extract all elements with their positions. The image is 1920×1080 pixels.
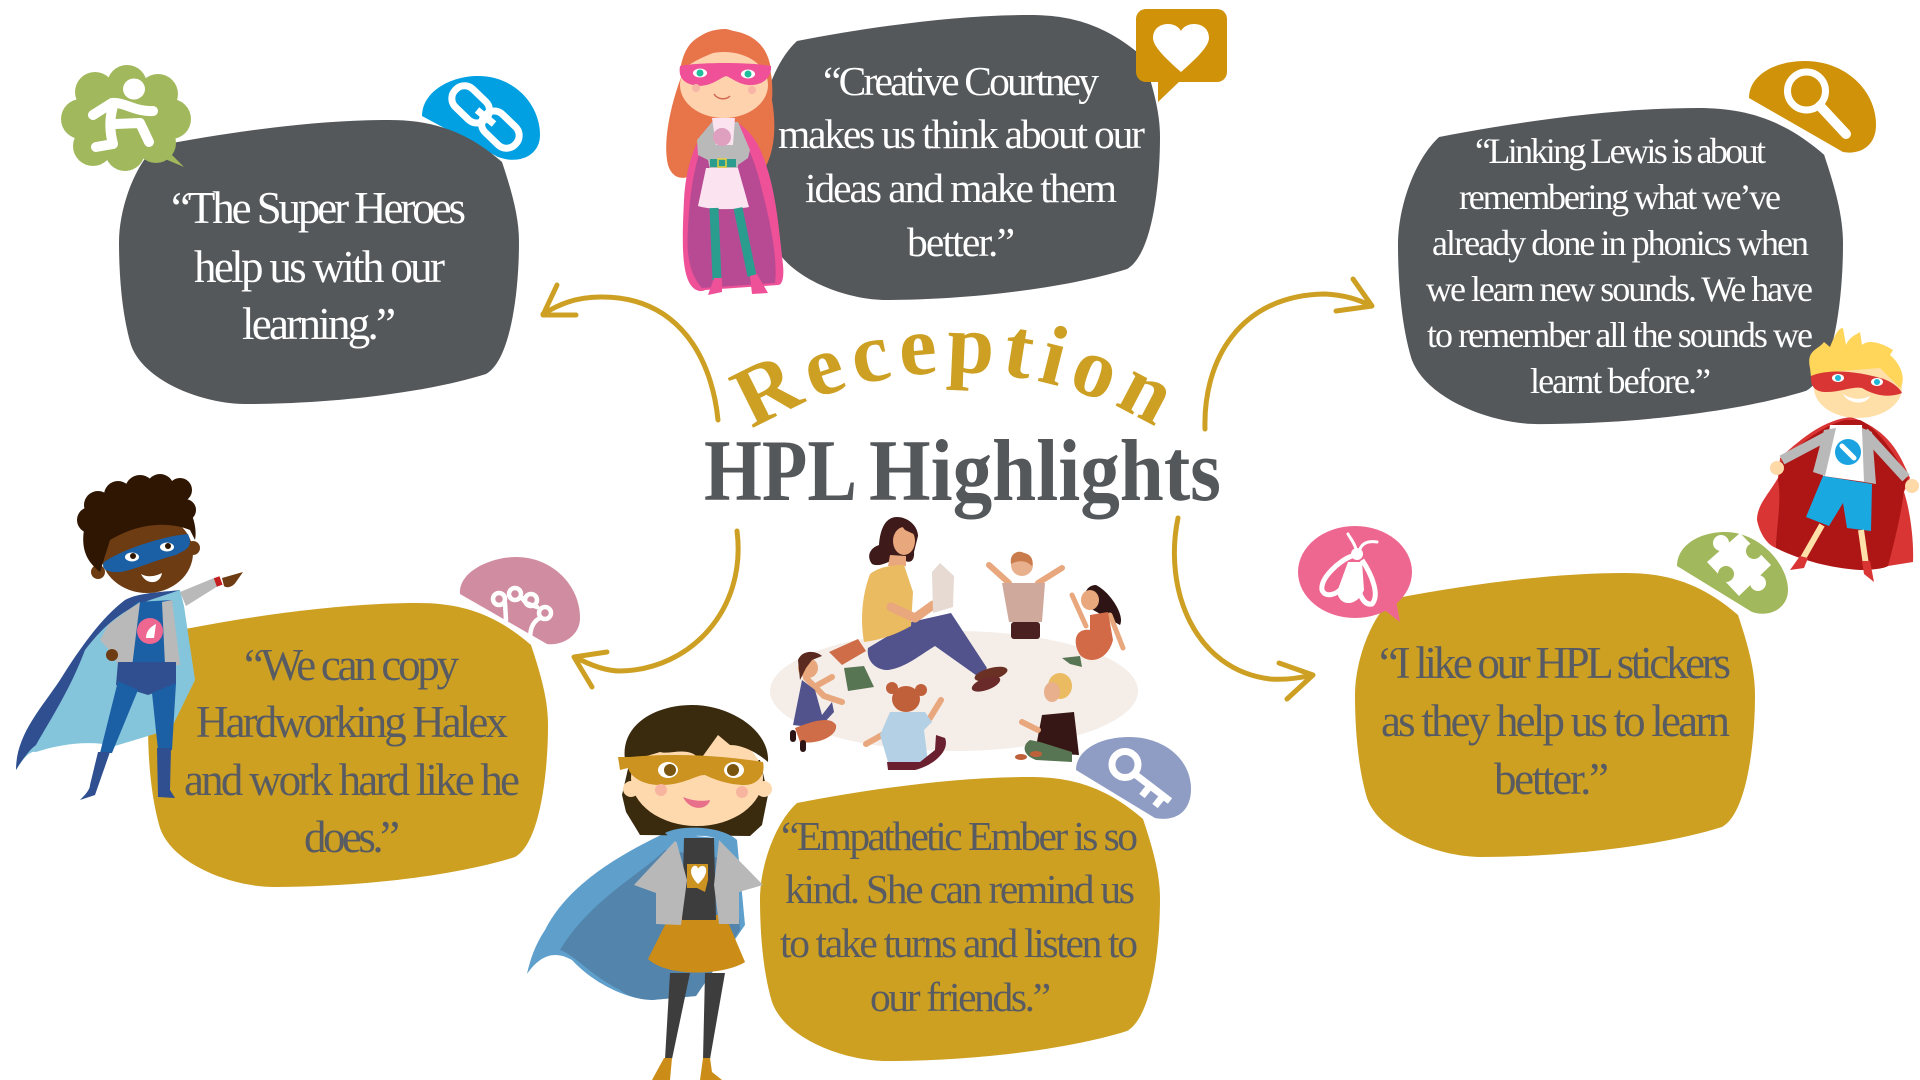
panel: HPL stickers quote — [1298, 526, 1788, 857]
quote text: our friends.” — [870, 974, 1051, 1020]
character: Creative Courtney — [666, 29, 783, 295]
quote text: “Linking Lewis is about — [1475, 131, 1766, 171]
title: HPL Highlights: HPL — [704, 423, 857, 520]
illustration: teacher reading to children — [770, 517, 1138, 770]
speech blob: grey — [119, 120, 519, 404]
icon: green puzzle bubble — [1677, 532, 1788, 614]
panel: Linking Lewis quote — [1398, 61, 1876, 424]
speech blob: gold — [1355, 573, 1755, 857]
speech blob: grey — [760, 15, 1160, 300]
icon: pink firefly bubble — [1298, 526, 1412, 622]
quote text: better.” — [907, 219, 1015, 265]
quote text: learning.” — [242, 299, 396, 349]
quote text: remembering what we’ve — [1459, 177, 1781, 217]
quote text: does.” — [304, 812, 400, 862]
quote text — [780, 813, 1138, 1020]
icon: key bubble — [1076, 737, 1191, 819]
quote text: better.” — [1494, 754, 1609, 804]
quote text: ideas and make them — [805, 165, 1117, 211]
speech blob: grey — [1398, 108, 1843, 424]
quote text: to take turns and listen to — [780, 920, 1138, 966]
quote text: as they help us to learn — [1381, 696, 1730, 746]
title: HPL Highlights — [704, 423, 1221, 520]
quote text: “I like our HPL stickers — [1379, 638, 1731, 688]
character: Linking Lewis — [1757, 328, 1919, 582]
speech blob: gold — [148, 603, 548, 887]
panel: Empathetic Ember quote — [760, 737, 1191, 1061]
icon: blue link bubble — [422, 76, 540, 160]
panel: Creative Courtney quote — [760, 9, 1227, 300]
title: HPL Highlights: Highlights — [869, 423, 1221, 520]
character: Hardworking Halex — [16, 474, 243, 800]
title: Reception: Reception — [728, 326, 1166, 428]
quote text: to remember all the sounds we — [1427, 315, 1813, 355]
icon: heart speech bubble — [1136, 9, 1227, 102]
quote text: makes us think about our — [778, 111, 1145, 157]
icon: pink curly plant bubble — [460, 557, 580, 644]
quote text: Hardworking Halex — [196, 697, 508, 747]
quote text: already done in phonics when — [1432, 223, 1809, 263]
character: Empathetic Ember — [527, 705, 772, 1080]
quote text: learnt before.” — [1530, 361, 1711, 401]
quote text: kind. She can remind us — [785, 866, 1135, 912]
quote text: “We can copy — [244, 640, 460, 690]
quote text: “The Super Heroes — [171, 183, 466, 233]
quote text: help us with our — [194, 242, 445, 292]
panel: Super Heroes quote — [61, 65, 540, 404]
quote text: “Creative Courtney — [823, 58, 1099, 104]
speech blob: gold — [760, 777, 1160, 1061]
quote text — [171, 183, 466, 349]
arrow: to Hardworking Halex quote — [574, 531, 738, 687]
quote text — [778, 58, 1145, 265]
arrow: to HPL stickers quote — [1174, 518, 1313, 699]
icon: magnifying glass bubble — [1749, 61, 1876, 153]
arrow: to Super Heroes quote — [543, 285, 718, 420]
icon: green running figure bubble — [61, 65, 191, 171]
quote text — [1379, 638, 1731, 804]
quote text: “Empathetic Ember is so — [781, 813, 1138, 859]
panel: Hardworking Halex quote — [148, 557, 580, 887]
quote text — [1426, 131, 1813, 401]
quote text: and work hard like he — [184, 755, 520, 805]
arrow: to Linking Lewis quote — [1205, 279, 1372, 429]
quote text — [184, 640, 520, 862]
quote text: we learn new sounds. We have — [1426, 269, 1813, 309]
